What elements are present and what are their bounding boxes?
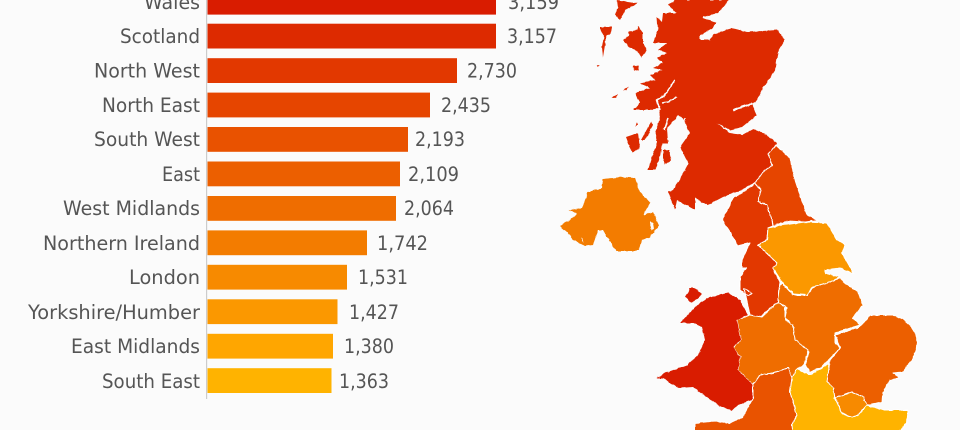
region: North West xyxy=(722,183,780,317)
row: Scotland: 3,157 xyxy=(507,25,557,48)
row: Yorkshire/Humber: Yorkshire/Humber xyxy=(27,301,201,324)
region: South East xyxy=(790,363,908,430)
inlet: Tay xyxy=(733,104,752,110)
region: Scotland xyxy=(597,0,785,210)
region: North East xyxy=(755,145,818,226)
region: Yorkshire and Humber xyxy=(758,222,854,295)
row: London xyxy=(129,265,408,290)
row: North West xyxy=(94,58,517,83)
row: Yorkshire/Humber: 1,427 xyxy=(349,301,399,324)
row: Northern Ireland: Northern Ireland xyxy=(43,232,200,255)
row: East: East xyxy=(162,163,200,186)
region: South West xyxy=(695,368,797,430)
row: East Midlands xyxy=(71,334,394,359)
row: Scotland xyxy=(120,24,557,48)
region: Northern Ireland xyxy=(560,177,659,251)
row: West Midlands: 2,064 xyxy=(404,197,454,220)
row: North East: 2,435 xyxy=(441,94,491,117)
row: Northern Ireland: 1,742 xyxy=(377,232,428,255)
row: South West: South West xyxy=(94,128,200,151)
row: South West xyxy=(94,127,465,152)
row: North East xyxy=(102,93,491,117)
row: Wales xyxy=(144,0,559,15)
inlets: west coast sea lochs xyxy=(657,80,685,138)
row: East Midlands: East Midlands xyxy=(71,335,200,358)
row: West Midlands: West Midlands xyxy=(63,197,200,220)
row: South East: 1,363 xyxy=(339,370,389,393)
row: South East xyxy=(102,368,389,393)
row: North West: North West xyxy=(94,60,200,82)
row: South West: 2,193 xyxy=(415,128,465,151)
row: East: 2,109 xyxy=(408,163,459,186)
row: Northern Ireland xyxy=(43,230,428,255)
inlet: Black Isle xyxy=(700,17,717,37)
row: West Midlands xyxy=(63,196,454,221)
row: London: 1,531 xyxy=(358,266,408,289)
row: East xyxy=(162,162,459,186)
row: London: London xyxy=(129,266,200,289)
region: East xyxy=(827,315,917,405)
row: South East: South East xyxy=(102,370,200,393)
row: North West: 2,730 xyxy=(467,60,517,82)
row: North East: North East xyxy=(102,94,200,117)
map of the UK xyxy=(560,0,917,430)
row: Scotland: Scotland xyxy=(120,25,200,48)
region: East Midlands xyxy=(778,278,863,372)
region: London xyxy=(835,392,867,417)
region: West Midlands xyxy=(733,302,808,385)
region: Wales xyxy=(657,288,753,411)
row: Yorkshire/Humber xyxy=(27,299,399,324)
row: East Midlands: 1,380 xyxy=(344,335,394,358)
bar chart xyxy=(27,0,559,399)
